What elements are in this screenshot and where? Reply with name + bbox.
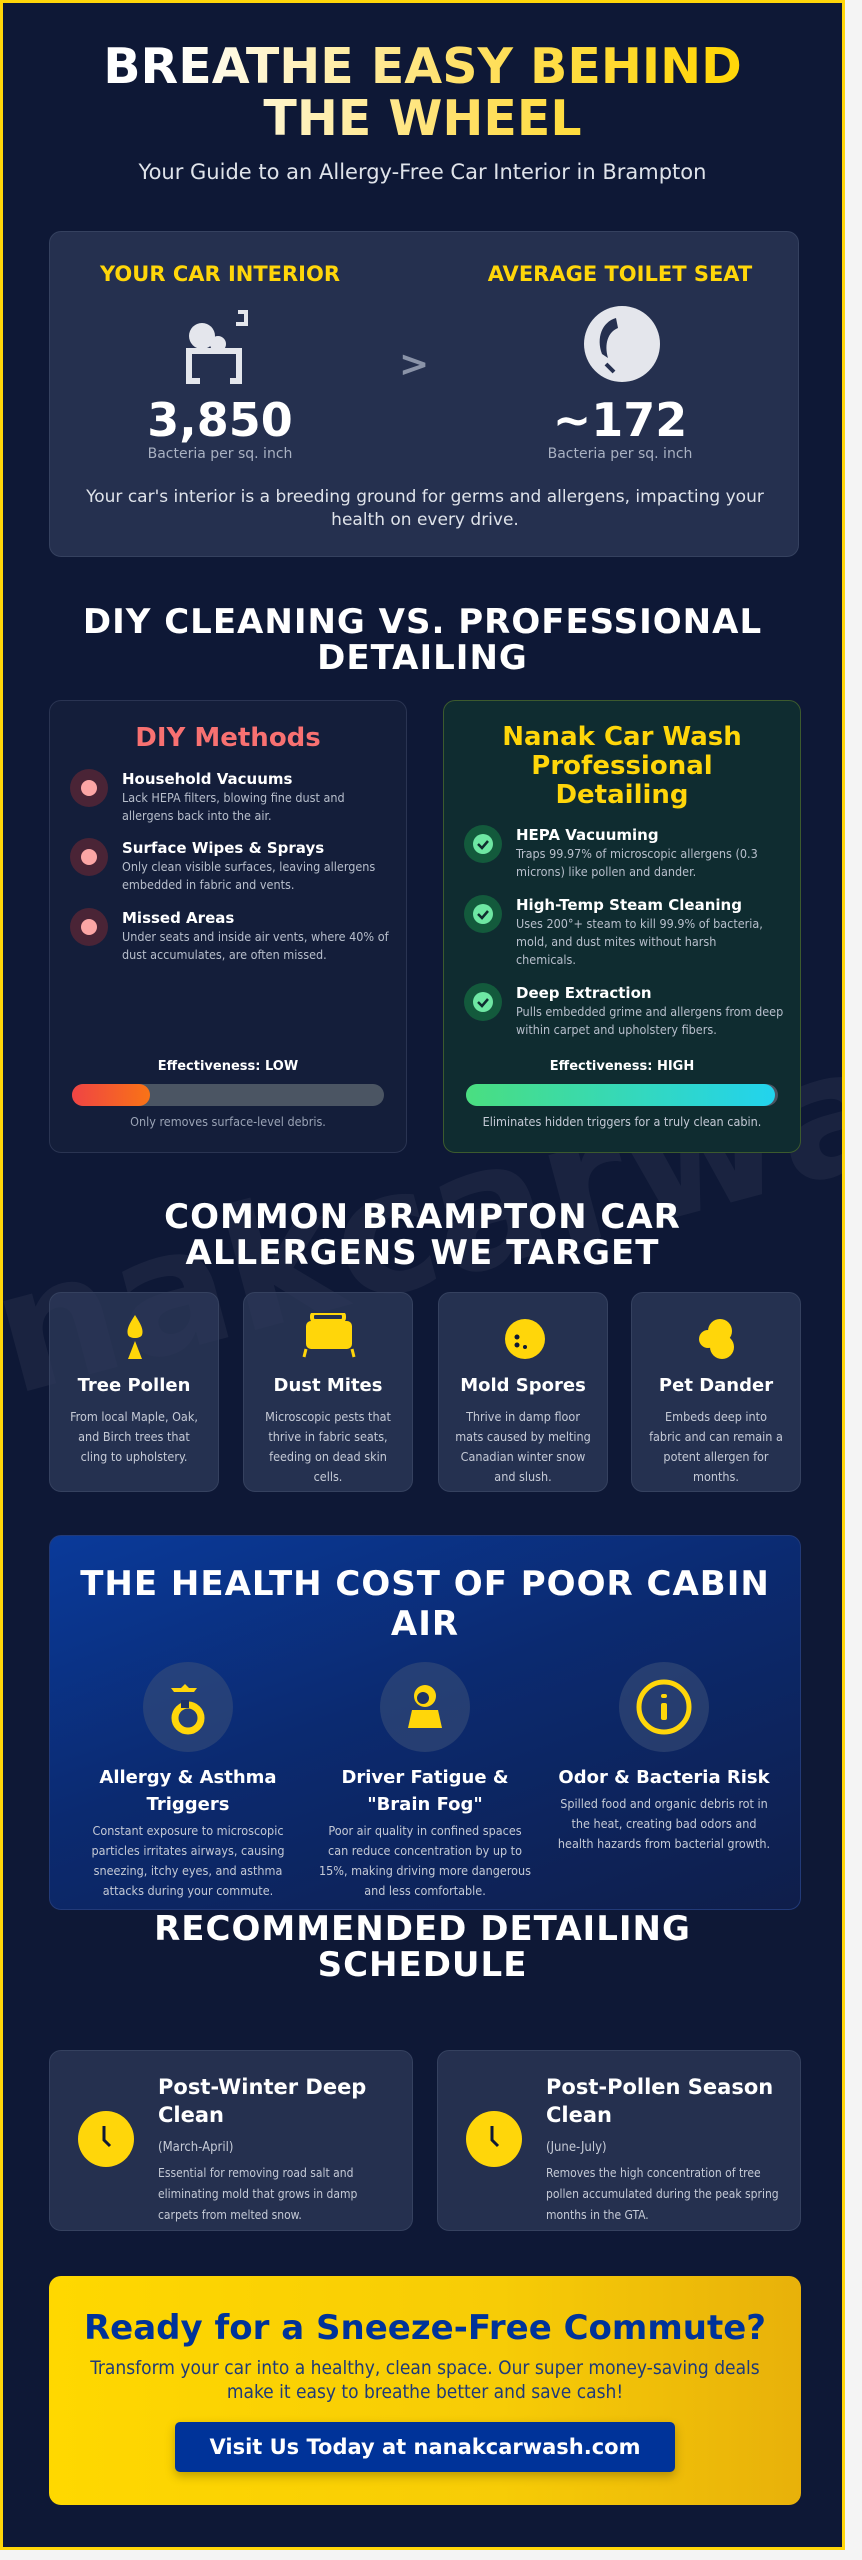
heading: toilet seat: AVERAGE TOILET SEAT xyxy=(488,262,752,286)
card: mold spores xyxy=(438,1292,608,1492)
panel: health cost xyxy=(49,1535,801,1910)
schedule card: post-pollen: Clean xyxy=(546,2103,612,2127)
icon: dander xyxy=(699,1319,734,1359)
heading: schedule: SCHEDULE xyxy=(318,1945,527,1985)
schedule card: post-pollen: Post-Pollen Season xyxy=(546,2075,773,2099)
heading: DIY vs professional: DIY CLEANING VS. PROFESSIONAL xyxy=(83,602,762,642)
heading: allergens xyxy=(164,1197,681,1273)
heading: allergens: ALLERGENS WE TARGET xyxy=(186,1233,659,1273)
item: vacuums: Household Vacuums xyxy=(122,770,292,788)
column: fatigue: "Brain Fog" xyxy=(367,1794,483,1815)
item: extraction: Pulls embedded grime and allergens from deep within carpet and upholstery fibers. xyxy=(516,1004,783,1037)
card: dust mites xyxy=(243,1292,413,1492)
title xyxy=(3,41,842,145)
greater-than sign: > xyxy=(399,344,429,385)
column: fatigue: Poor air quality in confined spaces can reduce concentration by up to 15%, making driving more dangerous and less comfortable. xyxy=(319,1823,531,1898)
CTA text: Transform your car into a healthy, clean space. Our super money-saving deals make it easy to breathe better and save cash! xyxy=(90,2357,760,2403)
heading: DIY: DIY Methods xyxy=(135,723,321,753)
subtitle: Your Guide to an Allergy-Free Car Interior in Brampton xyxy=(139,160,706,184)
effectiveness low bar: Only removes surface-level debris. xyxy=(130,1114,326,1129)
schedule card: post-pollen: (June-July) xyxy=(546,2140,607,2155)
heading: schedule: RECOMMENDED DETAILING xyxy=(154,1909,691,1949)
panel: comparison: Bacteria per sq. inch xyxy=(148,446,292,462)
item: extraction: Deep Extraction xyxy=(516,984,652,1002)
heading: car interior: YOUR CAR INTERIOR xyxy=(100,262,340,286)
item: wipes: Surface Wipes & Sprays xyxy=(122,839,324,857)
column: odor xyxy=(558,1662,770,1851)
CTA button xyxy=(175,2422,675,2472)
heading: health cost: THE HEALTH COST OF POOR CABIN xyxy=(80,1564,770,1604)
icon: allergy xyxy=(143,1662,233,1752)
panel: DIY methods xyxy=(49,700,407,1153)
item: wipes: Only clean visible surfaces, leaving allergens embedded in fabric and vents. xyxy=(122,859,375,892)
effectiveness high bar: Effectiveness: HIGH xyxy=(550,1059,694,1074)
schedule card: post-winter: Clean xyxy=(158,2103,224,2127)
schedule card: post-pollen xyxy=(437,2050,801,2231)
icon: toilet seat xyxy=(584,306,660,382)
card: mold spores: Mold Spores xyxy=(460,1375,586,1396)
effectiveness high bar: Eliminates hidden triggers for a truly clean cabin. xyxy=(483,1114,761,1129)
heading: professional xyxy=(502,722,742,810)
schedule card: post-pollen: Removes the high concentration of tree pollen accumulated during the peak spring months in the GTA. xyxy=(546,2166,779,2222)
schedule card: post-winter: Post-Winter Deep xyxy=(158,2075,366,2099)
item: missed: Missed Areas xyxy=(122,909,234,927)
text: description: Your car's interior is a breeding ground for germs and allergens, impacting your health on every drive. xyxy=(86,487,764,530)
panel: comparison: Bacteria per sq. inch xyxy=(548,446,692,462)
heading: professional: Nanak Car Wash xyxy=(502,722,742,752)
heading: DIY vs professional xyxy=(83,602,762,678)
column: fatigue xyxy=(319,1662,531,1898)
heading: health cost: AIR xyxy=(391,1604,459,1644)
heading: professional: Professional xyxy=(531,751,713,781)
column: odor: Spilled food and organic debris rot in the heat, creating bad odors and health hazards from bacterial growth. xyxy=(558,1796,770,1851)
card: pet dander: Embeds deep into fabric and can remain a potent allergen for months. xyxy=(649,1409,783,1484)
item: missed: Under seats and inside air vents, where 40% of dust accumulates, are often missed. xyxy=(122,929,389,962)
CTA panel xyxy=(49,2276,801,2505)
column: allergy: Triggers xyxy=(147,1794,229,1815)
allergen cards xyxy=(49,1292,801,1492)
item: extraction xyxy=(464,983,783,1037)
icon: clock xyxy=(466,2111,522,2167)
schedule card: post-winter xyxy=(49,2050,413,2231)
icon: pollen xyxy=(128,1315,142,1359)
item: HEPA: Traps 99.97% of microscopic allergens (0.3 microns) like pollen and dander. xyxy=(516,846,758,879)
item: steam: High-Temp Steam Cleaning xyxy=(516,896,742,914)
schedule card: post-winter: Essential for removing road salt and eliminating mold that grows in damp carpets from melted snow. xyxy=(158,2166,357,2222)
item: vacuums: Lack HEPA filters, blowing fine dust and allergens back into the air. xyxy=(122,790,345,823)
heading: allergens: COMMON BRAMPTON CAR xyxy=(164,1197,681,1237)
stat: ~172: ~172 xyxy=(553,393,687,447)
CTA button: Visit Us Today at nanakcarwash.com xyxy=(210,2435,640,2459)
item: steam: Uses 200°+ steam to kill 99.9% of bacteria, mold, and dust mites without harsh chemicals. xyxy=(516,916,763,967)
card: tree pollen: From local Maple, Oak, and Birch trees that cling to upholstery. xyxy=(70,1409,198,1464)
item: missed xyxy=(70,908,389,962)
panel: comparison xyxy=(49,231,799,557)
effectiveness high bar xyxy=(466,1059,778,1129)
column: odor: Odor & Bacteria Risk xyxy=(558,1767,770,1788)
effectiveness low bar xyxy=(72,1059,384,1129)
heading: DIY vs professional: DETAILING xyxy=(317,638,528,678)
CTA heading: Ready for a Sneeze-Free Commute? xyxy=(84,2308,766,2348)
title: BREATHE EASY BEHIND xyxy=(103,38,742,95)
card: tree pollen: Tree Pollen xyxy=(78,1375,190,1396)
item: wipes xyxy=(70,838,375,892)
card: tree pollen xyxy=(49,1292,219,1492)
card: dust mites: Dust Mites xyxy=(274,1375,382,1396)
heading: professional: Detailing xyxy=(555,780,689,810)
icon: car seat xyxy=(186,310,248,384)
title: THE WHEEL xyxy=(263,90,582,147)
item: vacuums xyxy=(70,769,345,823)
item: HEPA xyxy=(464,825,758,879)
stat: 3,850: 3,850 xyxy=(147,393,293,447)
icon: clock xyxy=(78,2111,134,2167)
card: pet dander xyxy=(631,1292,801,1492)
heading: schedule xyxy=(154,1909,691,1985)
schedule card: post-winter: (March-April) xyxy=(158,2140,233,2155)
column: fatigue: Driver Fatigue & xyxy=(341,1767,509,1788)
item: steam xyxy=(464,895,763,967)
icon: info xyxy=(619,1662,709,1752)
effectiveness low bar: Effectiveness: LOW xyxy=(158,1059,298,1074)
item: HEPA: HEPA Vacuuming xyxy=(516,826,659,844)
heading: health cost xyxy=(80,1564,770,1644)
card: mold spores: Thrive in damp floor mats caused by melting Canadian winter snow and slush. xyxy=(455,1409,591,1484)
card: pet dander: Pet Dander xyxy=(659,1375,773,1396)
icon: spore xyxy=(505,1319,545,1359)
column: allergy xyxy=(91,1662,284,1898)
icon: driver xyxy=(380,1662,470,1752)
column: allergy: Allergy & Asthma xyxy=(99,1767,277,1788)
panel: professional xyxy=(443,700,801,1153)
column: allergy: Constant exposure to microscopic particles irritates airways, causing sneezing, itchy eyes, and asthma attacks during your commute. xyxy=(91,1823,284,1898)
icon: mite xyxy=(302,1313,356,1358)
card: dust mites: Microscopic pests that thrive in fabric seats, feeding on dead skin cells. xyxy=(265,1409,391,1484)
